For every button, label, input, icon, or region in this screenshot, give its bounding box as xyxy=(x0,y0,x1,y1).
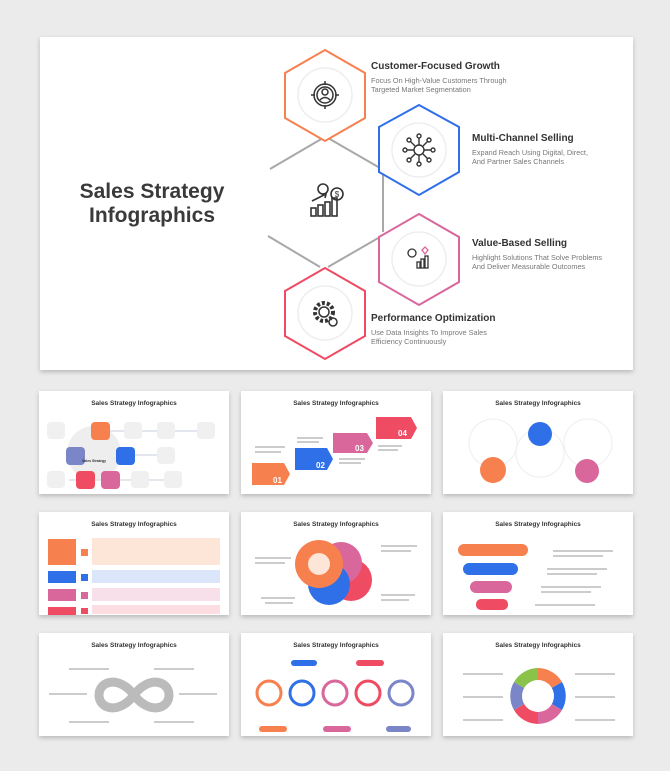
thumbnail 4: step table: Sales Strategy Infographics xyxy=(91,521,177,528)
hexagon 3: value-based xyxy=(379,214,459,305)
thumbnail 5: overlapping circles xyxy=(241,512,431,615)
thumbnail 1: hexagon network xyxy=(39,391,229,494)
title: Sales Strategy xyxy=(80,180,225,203)
thumbnail 9: segmented ring: Sales Strategy Infographics xyxy=(495,642,581,649)
thumbnail 2: strategy steps: 02 xyxy=(316,461,325,470)
hexagon 2: multi-channel xyxy=(379,105,459,195)
thumbnail 6: funnel xyxy=(443,512,633,615)
thumbnail 2: strategy steps xyxy=(241,391,431,494)
text: customer-focused growth xyxy=(371,61,507,94)
text: multi-channel: Multi-Channel Selling xyxy=(472,133,574,144)
icon: target person xyxy=(311,81,339,109)
title: Infographics xyxy=(89,204,215,227)
text: value-based xyxy=(472,238,602,271)
icon: network xyxy=(403,134,435,166)
text: customer-focused growth: Targeted Market Segmentation xyxy=(371,85,471,94)
text: customer-focused growth: Customer-Focused Growth xyxy=(371,61,500,72)
thumbnail 2: strategy steps: 01 xyxy=(273,476,282,485)
icon: bulb chart xyxy=(408,247,428,268)
thumbnail 7: infinity loop xyxy=(39,633,229,736)
thumbnail 7: infinity loop: Sales Strategy Infographics xyxy=(91,642,177,649)
icon: center sales growth: $ xyxy=(335,190,340,199)
thumbnail 2: strategy steps: 04 xyxy=(398,429,407,438)
thumbnail 6: funnel: Sales Strategy Infographics xyxy=(495,521,581,528)
text: value-based: And Deliver Measurable Outcomes xyxy=(472,262,586,271)
hexagon 4: performance xyxy=(285,268,365,359)
thumbnail 1: hexagon network: Sales Strategy Infographics xyxy=(91,400,177,407)
thumbnail 8: circle row xyxy=(241,633,431,736)
thumbnail 3: droplet circles: Sales Strategy Infographics xyxy=(495,400,581,407)
text: performance: Use Data Insights To Improve Sales xyxy=(371,328,487,337)
text: multi-channel: Expand Reach Using Digital, Direct, xyxy=(472,148,588,157)
thumbnail 2: strategy steps: 03 xyxy=(355,444,364,453)
thumbnail 8: circle row: Sales Strategy Infographics xyxy=(293,642,379,649)
text: value-based: Value-Based Selling xyxy=(472,238,567,249)
thumbnail 3: droplet circles xyxy=(443,391,633,494)
title xyxy=(80,180,225,227)
thumbnail 5: overlapping circles: Sales Strategy Infographics xyxy=(293,521,379,528)
text: performance: Efficiency Continuously xyxy=(371,337,447,346)
thumbnail 1: hexagon network: Sales Strategy xyxy=(82,459,106,463)
thumbnail 4: step table xyxy=(39,512,229,615)
thumbnail 2: strategy steps: Sales Strategy Infographics xyxy=(293,400,379,407)
text: performance: Performance Optimization xyxy=(371,313,495,324)
hexagon 1: customer-focused growth xyxy=(285,50,365,141)
icon: gear xyxy=(315,303,337,326)
text: performance xyxy=(371,313,495,346)
icon: center sales growth xyxy=(311,184,343,216)
text: value-based: Highlight Solutions That Solve Problems xyxy=(472,253,602,262)
text: multi-channel: And Partner Sales Channels xyxy=(472,157,564,166)
main slide xyxy=(40,37,633,370)
text: multi-channel xyxy=(472,133,588,166)
connector lines xyxy=(268,138,383,267)
text: customer-focused growth: Focus On High-Value Customers Through xyxy=(371,76,507,85)
thumbnail 9: segmented ring xyxy=(443,633,633,736)
